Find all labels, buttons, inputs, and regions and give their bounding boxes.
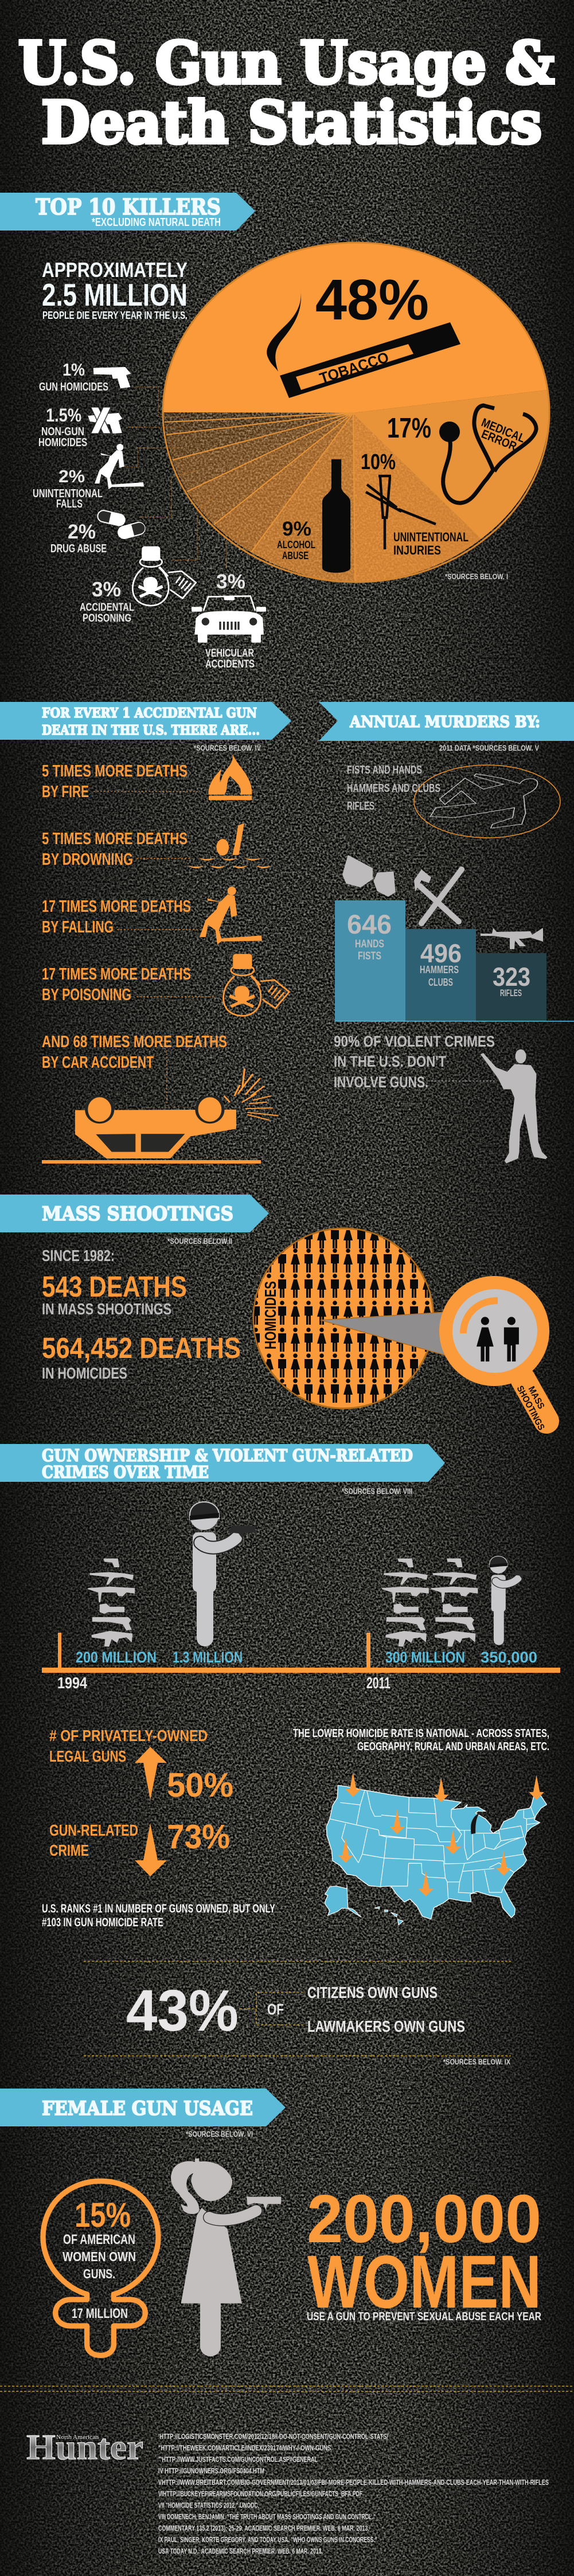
footer dividers bbox=[0, 2386, 574, 2391]
dotted leader lines bbox=[124, 387, 248, 569]
row: car accident: BY CAR ACCIDENT bbox=[42, 1053, 154, 1072]
text: approximately 2.5 million: 2.5 MILLION bbox=[42, 277, 188, 313]
legend text: HAMMERS AND CLUBS bbox=[347, 782, 440, 795]
slice: unintentional injuries 10%: UNINTENTIONAL bbox=[393, 530, 468, 544]
row: poisoning: BY POISONING bbox=[42, 986, 131, 1004]
heading ribbon: gun ownership and violent crimes: CRIMES OVER TIME bbox=[42, 1462, 209, 1482]
icon: rifle bbox=[481, 928, 543, 949]
label: gun homicides 1%: GUN HOMICIDES bbox=[39, 381, 108, 393]
stats text: IN MASS SHOOTINGS bbox=[42, 1300, 171, 1318]
heading ribbon: for every 1 accidental gun death bbox=[0, 702, 291, 740]
panel: 43% citizens and lawmakers: *SOURCES BELOW. IX bbox=[443, 2057, 511, 2066]
icon: female symbol with stats: 15% bbox=[75, 2196, 131, 2234]
bar: hands and fists 646 bbox=[335, 900, 405, 1021]
sources list bbox=[158, 2432, 549, 2555]
icon: magnifying glass: MASS bbox=[526, 1385, 546, 1411]
text: lower homicide rate bbox=[293, 1727, 549, 1753]
heading ribbon: mass shootings: MASS SHOOTINGS bbox=[42, 1203, 233, 1225]
circle: homicides crowd bbox=[252, 1224, 434, 1408]
sources list: "'HTTP://WWW.JUSTFACTS.COM/GUNCONTROL.ASP#GENERAL bbox=[158, 2455, 318, 2464]
labels: LAWMAKERS OWN GUNS bbox=[307, 2017, 465, 2035]
slice: tobacco 48%: TOBACCO bbox=[317, 348, 391, 387]
label: vehicular accidents 3%: 3% bbox=[216, 571, 245, 593]
label: gun homicides 1%: 1% bbox=[63, 360, 85, 380]
stat: 200,000 women: 200,000 bbox=[307, 2181, 541, 2257]
label: non-gun homicides 1.5%: NON-GUN bbox=[41, 426, 84, 438]
timeline: 300 MILLION bbox=[385, 1649, 465, 1666]
stat: legal guns up 50% bbox=[49, 1727, 233, 1804]
heading ribbon: gun ownership and violent crimes: GUN OWNERSHIP & VIOLENT GUN-RELATED bbox=[42, 1446, 413, 1465]
row: fire bbox=[42, 754, 252, 801]
icon column: guns 1994 bbox=[88, 1559, 135, 1646]
icon: shooter 2011 bbox=[490, 1556, 530, 1645]
icon: female symbol with stats: 17 MILLION bbox=[72, 2306, 128, 2321]
title bbox=[18, 29, 555, 157]
panel: mass shootings bbox=[0, 1195, 549, 1432]
heading ribbon: top 10 killers: *EXCLUDING NATURAL DEATH bbox=[92, 216, 221, 229]
icon: female symbol with stats: GUNS. bbox=[83, 2266, 115, 2281]
bar: rifles 323 bbox=[476, 953, 546, 1021]
bar: rifles 323: 323 bbox=[493, 962, 530, 992]
sources list: VIII DOMENECH, BENJAMIN. "THE TRUTH ABOUT MASS SHOOTINGS AND GUN CONTROL." bbox=[158, 2512, 376, 2521]
stat: legal guns up 50%: LEGAL GUNS bbox=[49, 1747, 126, 1765]
stats text: SINCE 1982: bbox=[42, 1247, 115, 1264]
heading ribbon: gun ownership and violent crimes bbox=[0, 1444, 445, 1482]
callout: 90% of violent crimes: INVOLVE GUNS. bbox=[334, 1074, 428, 1091]
slice: medical error 17%: 17% bbox=[387, 413, 431, 444]
slice: tobacco 48%: 48% bbox=[315, 268, 429, 332]
sources list: COMMENTARY 135.2 (2013): 25-29. ACADEMIC SEARCH PREMIER. WEB. 6 MAR. 2013. bbox=[158, 2524, 369, 2532]
heading ribbon: annual murders by bbox=[319, 702, 574, 741]
label: vehicular accidents 3%: ACCIDENTS bbox=[205, 658, 255, 670]
timeline: 1994 bbox=[57, 1674, 87, 1692]
legend text: FISTS AND HANDS bbox=[347, 764, 422, 776]
icon: gunman silhouette bbox=[481, 1049, 548, 1164]
panel: top 10 killers bbox=[0, 193, 549, 670]
icon: magnifying glass: SHOOTINGS bbox=[514, 1384, 546, 1432]
bar: hammers and clubs 496: CLUBS bbox=[428, 977, 453, 988]
stat: gun-related crime down 73%: CRIME bbox=[49, 1841, 89, 1859]
slice: medical error 17%: MEDICAL bbox=[479, 416, 527, 446]
row: falling bbox=[42, 887, 262, 944]
bar: hands and fists 646: HANDS bbox=[355, 938, 384, 950]
label: non-gun homicides 1.5%: HOMICIDES bbox=[38, 436, 87, 449]
label: unintentional falls 2%: UNINTENTIONAL bbox=[33, 487, 103, 500]
panel: mass shootings: *SOURCES BELOW.II bbox=[167, 1236, 232, 1246]
heading ribbon: for every 1 accidental gun death: FOR EVERY 1 ACCIDENTAL GUN bbox=[42, 705, 257, 721]
heading ribbon: top 10 killers bbox=[0, 193, 255, 231]
panel: annual murders by: 2011 DATA *SOURCES BELOW. V bbox=[439, 743, 540, 752]
row: drowning bbox=[42, 823, 272, 869]
sources list: 'HTTP://LOGISTICSMONSTER.COM/2012/12/18/I-DO-NOT-CONSENT/GUN-CONTROL-STATS/ bbox=[158, 2432, 388, 2441]
icon: chalk body outline bbox=[414, 765, 560, 838]
row: poisoning bbox=[42, 954, 289, 1016]
big number 43%: 43% bbox=[126, 1978, 239, 2043]
row: poisoning: 17 TIMES MORE DEATHS bbox=[42, 965, 191, 983]
heading ribbon: mass shootings bbox=[0, 1195, 269, 1232]
icon: woman with gun bbox=[171, 2159, 282, 2356]
stat: 200,000 women bbox=[307, 2181, 541, 2324]
timeline: 1.3 MILLION bbox=[173, 1649, 243, 1666]
panel: gun ownership over time bbox=[0, 1444, 560, 1692]
stats text: IN HOMICIDES bbox=[42, 1364, 127, 1382]
bar: hammers and clubs 496: HAMMERS bbox=[420, 964, 459, 975]
stat: legal guns up 50%: # OF PRIVATELY-OWNED bbox=[49, 1727, 208, 1744]
panel: annual murders by bbox=[319, 702, 574, 1164]
labels: CITIZENS OWN GUNS bbox=[307, 1984, 438, 2001]
slice: unintentional injuries 10%: INJURIES bbox=[393, 543, 441, 557]
slice: alcohol abuse 9%: 9% bbox=[282, 518, 311, 540]
circle: homicides crowd: HOMICIDES bbox=[261, 1281, 279, 1349]
source note: *SOURCES BELOW. I bbox=[445, 572, 508, 581]
icon: magnifying glass bbox=[439, 1276, 549, 1432]
row: drowning: BY DROWNING bbox=[42, 850, 133, 869]
labels bbox=[267, 1984, 465, 2035]
row: falling: 17 TIMES MORE DEATHS bbox=[42, 897, 191, 916]
heading ribbon: for every 1 accidental gun death: DEATH IN THE U.S. THERE ARE... bbox=[42, 723, 260, 738]
legend text bbox=[347, 764, 440, 813]
panel: for every accidental gun death bbox=[0, 702, 291, 1164]
text: us ranks bbox=[42, 1902, 275, 1929]
heading ribbon: female gun usage bbox=[0, 2089, 286, 2126]
timeline: 2011 bbox=[366, 1674, 391, 1692]
callout: 90% of violent crimes: 90% OF VIOLENT CRIMES bbox=[334, 1033, 495, 1050]
bar: hammers and clubs 496 bbox=[405, 929, 476, 1021]
panel: female gun usage bbox=[0, 2089, 541, 2356]
label: non-gun homicides 1.5%: 1.5% bbox=[46, 405, 81, 426]
text: us ranks: U.S. RANKS #1 IN NUMBER OF GUNS OWNED, BUT ONLY bbox=[42, 1902, 275, 1915]
stats text: 543 DEATHS bbox=[42, 1270, 187, 1303]
stat: gun-related crime down 73%: 73% bbox=[167, 1818, 230, 1856]
sources list: USA TODAY N.D.: ACADEMIC SEARCH PREMIER. WEB. 6 MAR. 2013. bbox=[158, 2547, 323, 2555]
label: unintentional falls 2%: 2% bbox=[58, 466, 85, 486]
label: accidental poisoning 3% bbox=[80, 547, 196, 625]
labels: OF bbox=[267, 2001, 284, 2018]
row: fire: 5 TIMES MORE DEATHS bbox=[42, 762, 188, 780]
label: accidental poisoning 3%: POISONING bbox=[83, 612, 131, 625]
icon: fists bbox=[342, 855, 396, 897]
sources list: "HTTP://THEWEEK.COM/ARTICLE/INDEX/239174/WHY-I-OWN-GUNS bbox=[158, 2444, 331, 2452]
sources list: IV HTTP://GUNOWNERS.ORG/FS0404.HTM bbox=[158, 2466, 264, 2475]
bar: hammers and clubs 496: 496 bbox=[420, 939, 462, 968]
stat: gun-related crime down 73% bbox=[49, 1818, 230, 1876]
panel: 43% citizens and lawmakers bbox=[84, 1961, 511, 2066]
slice: unintentional injuries 10%: 10% bbox=[361, 450, 396, 474]
label: unintentional falls 2%: FALLS bbox=[56, 498, 83, 510]
stats text: 564,452 DEATHS bbox=[42, 1332, 241, 1364]
slice: tobacco 48% bbox=[267, 268, 460, 398]
heading ribbon: female gun usage: FEMALE GUN USAGE bbox=[42, 2097, 253, 2120]
stat: gun-related crime down 73%: GUN-RELATED bbox=[49, 1821, 138, 1839]
pointer wedge bbox=[321, 1312, 445, 1355]
callout: 90% of violent crimes: IN THE U.S. DON'T bbox=[334, 1053, 446, 1070]
row: fire: BY FIRE bbox=[42, 783, 89, 801]
text: approximately 2.5 million: PEOPLE DIE EVERY YEAR IN THE U.S. bbox=[42, 310, 188, 321]
label: drug abuse 2%: DRUG ABUSE bbox=[50, 542, 107, 555]
slice: alcohol abuse 9%: ABUSE bbox=[282, 550, 309, 561]
panel: for every accidental gun death: *SOURCES BELOW. IV bbox=[194, 743, 261, 752]
panel: guns up crime down bbox=[42, 1727, 549, 1929]
label: gun homicides 1% bbox=[39, 360, 131, 393]
bar chart: annual murders bbox=[335, 900, 574, 1022]
stats text bbox=[42, 1247, 241, 1382]
row: car accident bbox=[42, 1033, 278, 1164]
sources list: IX PAUL, SINGER, KORTE GREGORY, AND TODAY USA. "WHO OWNS GUNS IN CONGRESS." bbox=[158, 2535, 377, 2544]
slice: medical error 17% bbox=[387, 405, 536, 503]
row: car accident: AND 68 TIMES MORE DEATHS bbox=[42, 1033, 227, 1051]
text: us ranks: #103 IN GUN HOMICIDE RATE bbox=[42, 1916, 163, 1929]
icon: female symbol with stats bbox=[43, 2181, 158, 2355]
label: drug abuse 2%: 2% bbox=[68, 521, 96, 543]
label: vehicular accidents 3%: VEHICULAR bbox=[205, 647, 254, 659]
label: accidental poisoning 3%: ACCIDENTAL bbox=[80, 602, 134, 614]
row: drowning: 5 TIMES MORE DEATHS bbox=[42, 830, 188, 848]
map: united states bbox=[325, 1772, 546, 1925]
bar: rifles 323: RIFLES bbox=[500, 988, 522, 998]
icon: shooter 1994 bbox=[190, 1501, 256, 1646]
heading ribbon: annual murders by: ANNUAL MURDERS BY: bbox=[349, 713, 540, 731]
sources list: VII "HOMICIDE STATISTICS 2012." UNODC. bbox=[158, 2501, 259, 2509]
label: drug abuse 2% bbox=[50, 509, 147, 555]
icon columns: guns 2011 bbox=[382, 1559, 478, 1646]
text: approximately 2.5 million bbox=[42, 258, 188, 321]
slice: unintentional injuries 10% bbox=[361, 450, 468, 557]
label: accidental poisoning 3%: 3% bbox=[92, 577, 121, 601]
slice: alcohol abuse 9% bbox=[277, 459, 350, 573]
panel: female gun usage: *SOURCES BELOW. VI bbox=[186, 2129, 253, 2138]
title: U.S. Gun Usage & bbox=[18, 29, 555, 97]
logo: north american hunter: Hunter bbox=[26, 2428, 143, 2467]
logo: north american hunter: North American bbox=[56, 2434, 99, 2441]
pie chart: causes of death bbox=[163, 243, 549, 582]
bar: hands and fists 646: FISTS bbox=[358, 950, 381, 962]
heading ribbon: top 10 killers: TOP 10 KILLERS bbox=[36, 194, 221, 220]
label: non-gun homicides 1.5% bbox=[38, 405, 122, 449]
stat: legal guns up 50%: 50% bbox=[167, 1766, 233, 1804]
icon: hammer and club bbox=[414, 869, 462, 923]
slice: medical error 17%: ERROR bbox=[479, 427, 518, 454]
panel: gun ownership over time: *SOURCES BELOW. VIII bbox=[342, 1486, 412, 1496]
label: unintentional falls 2% bbox=[33, 444, 144, 510]
timeline bbox=[42, 1633, 560, 1692]
callout: 90% of violent crimes bbox=[334, 1033, 496, 1091]
legend text: RIFLES bbox=[347, 800, 374, 813]
row: falling: BY FALLING bbox=[42, 918, 114, 936]
title: Death Statistics bbox=[41, 88, 542, 157]
label: vehicular accidents 3% bbox=[192, 571, 266, 670]
timeline: 350,000 bbox=[481, 1649, 537, 1666]
bracket bbox=[240, 1992, 303, 2025]
icon: female symbol with stats: WOMEN OWN bbox=[63, 2249, 136, 2264]
bar: hands and fists 646: 646 bbox=[347, 909, 392, 939]
icon: female symbol with stats: OF AMERICAN bbox=[63, 2232, 135, 2247]
text: approximately 2.5 million: APPROXIMATELY bbox=[42, 258, 188, 282]
sources list: VIHTTP://BUCKEYEFIREARMSFOUNDATION.ORG/PUBLICFILES/GUNFACTS_BFA.PDF bbox=[158, 2489, 362, 2498]
slice: alcohol abuse 9%: ALCOHOL bbox=[277, 539, 315, 551]
timeline: 200 MILLION bbox=[76, 1649, 157, 1666]
